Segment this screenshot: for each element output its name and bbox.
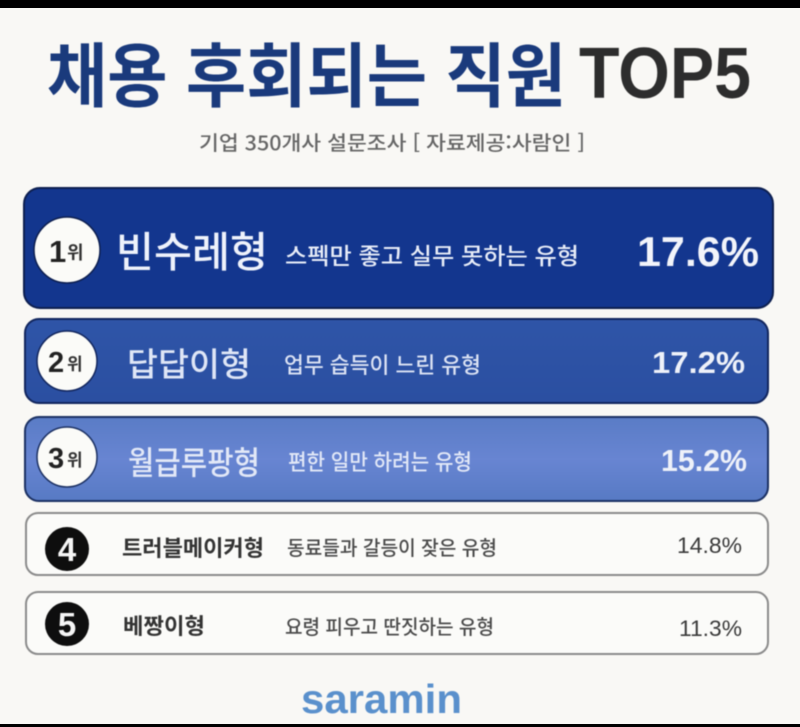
panel: rank 3 <box>25 417 768 501</box>
title: TOP5 <box>579 34 751 114</box>
description 1: 스펙만 좋고 실무 못하는 유형 <box>285 237 579 271</box>
type name 1: 빈수레형 <box>116 219 268 280</box>
rank badge 2: 위 <box>67 350 83 375</box>
rank badge 4 <box>45 527 89 571</box>
type name 4: 트러블메이커형 <box>122 531 264 563</box>
saramin logo: saramin <box>301 676 462 722</box>
percent 4: 14.8% <box>677 533 742 558</box>
subtitle: 기업 350개사 설문조사 [ 자료제공:사람인 ] <box>199 127 585 156</box>
panel: rank 4 <box>26 513 768 575</box>
description 2: 업무 습득이 느린 유형 <box>284 348 481 380</box>
description 3: 편한 일만 하려는 유형 <box>288 445 472 477</box>
rank badge 3: 위 <box>67 446 83 471</box>
rank badge 2 <box>37 331 97 391</box>
percent 5: 11.3% <box>679 616 742 641</box>
type name 5: 베짱이형 <box>123 609 205 641</box>
panel: rank 1 <box>24 188 773 308</box>
percent 2: 17.2% <box>652 345 745 380</box>
panel: rank 2 <box>25 319 768 403</box>
rank badge 1: 1 <box>49 234 66 269</box>
title: 채용 후회되는 직원 <box>47 21 566 122</box>
rank badge 3: 3 <box>48 443 64 475</box>
rank badge 5 <box>45 602 89 646</box>
description 5: 요령 피우고 딴짓하는 유형 <box>285 611 494 640</box>
rank badge 3 <box>37 427 97 487</box>
type name 3: 월급루팡형 <box>128 438 260 484</box>
rank badge 5: 5 <box>58 606 76 643</box>
rank badge 2: 2 <box>48 347 64 379</box>
rank badge 4: 4 <box>58 531 77 568</box>
percent 3: 15.2% <box>661 443 747 478</box>
type name 2: 답답이형 <box>127 338 251 386</box>
panel: rank 5 <box>26 592 768 654</box>
description 4: 동료들과 갈등이 잦은 유형 <box>287 532 497 561</box>
rank badge 1: 위 <box>67 239 84 265</box>
rank badge 1 <box>34 217 100 283</box>
percent 1: 17.6% <box>637 228 759 275</box>
